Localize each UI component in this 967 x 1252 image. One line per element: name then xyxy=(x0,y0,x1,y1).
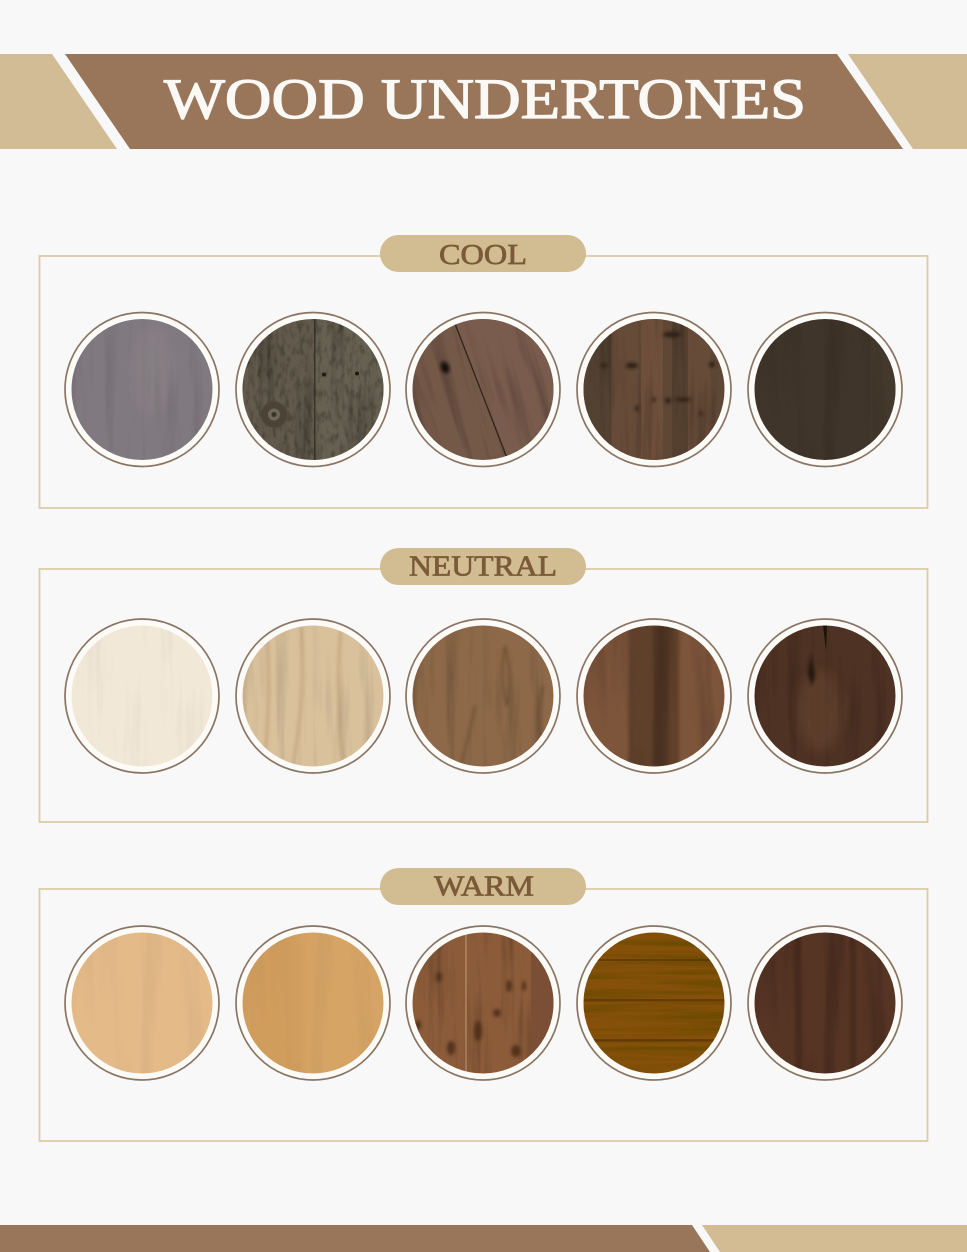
swatch: grey wash wood xyxy=(65,312,219,466)
swatch: golden maple wood xyxy=(236,926,390,1080)
panel: warm xyxy=(40,868,928,1141)
swatch: rustic knotty walnut xyxy=(406,926,560,1080)
header left tan accent xyxy=(0,54,117,149)
header banner xyxy=(0,54,967,149)
panel: cool xyxy=(40,235,928,526)
neutral heading pill: NEUTRAL xyxy=(409,550,557,582)
swatch: deep chocolate wood xyxy=(748,926,902,1080)
panel: neutral xyxy=(40,548,928,822)
header brown ribbon xyxy=(65,54,903,149)
swatch: weathered grey-brown wood xyxy=(236,312,390,466)
swatch: light oak wood xyxy=(236,619,390,773)
neutral frame xyxy=(40,569,928,822)
swatch: amber horizontal grain xyxy=(577,926,731,1080)
warm heading pill: WARM xyxy=(434,870,534,902)
warm frame xyxy=(40,889,928,1141)
footer band xyxy=(0,1225,967,1252)
swatch: dark walnut wood xyxy=(748,619,902,773)
title: WOOD UNDERTONES xyxy=(164,68,806,131)
footer brown segment xyxy=(0,1225,710,1252)
cool heading pill xyxy=(380,235,586,272)
footer tan segment xyxy=(702,1225,967,1252)
neutral heading pill xyxy=(380,548,586,585)
swatch: knotted dark brown planks xyxy=(577,312,731,466)
warm heading pill xyxy=(380,868,586,905)
swatch: honey oak wood xyxy=(65,926,219,1080)
swatch: pale cream wood xyxy=(65,619,219,773)
cool heading pill: COOL xyxy=(439,239,527,271)
swatch: walnut vertical grain xyxy=(577,619,731,773)
swatch: charcoal brown wood xyxy=(748,312,902,466)
cool frame xyxy=(40,256,928,508)
swatch: medium walnut wood xyxy=(406,619,560,773)
swatch: diagonal plank brown wood xyxy=(405,312,561,468)
header right tan accent xyxy=(848,54,967,149)
